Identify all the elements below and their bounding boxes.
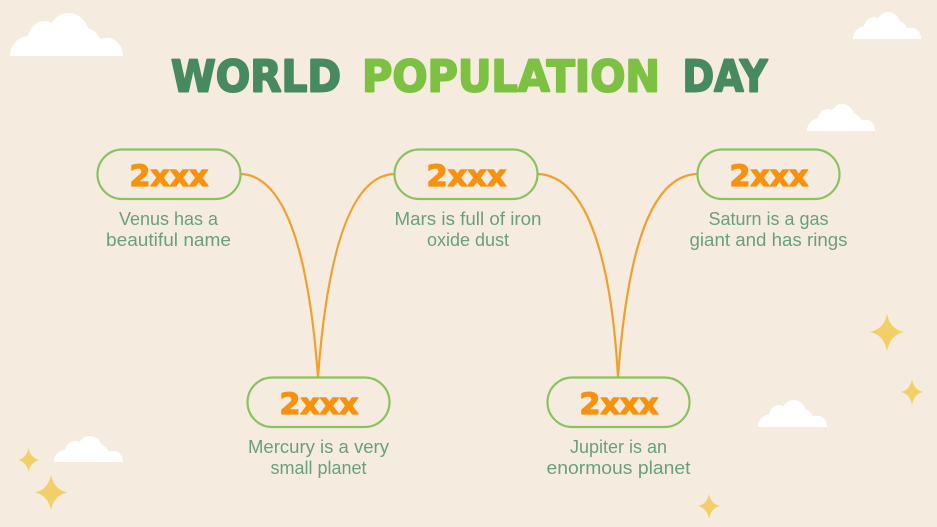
title: WORLD [171,52,341,102]
milestone: Saturn: Saturn is a gas [708,209,829,229]
milestone: Mercury [248,378,390,478]
milestone: Mercury: Mercury is a very [248,437,389,457]
icon: cloud top left [10,13,123,56]
milestone: Jupiter: enormous planet [546,458,690,478]
icon: star right small [901,379,923,405]
icon: star bottom left large [35,475,67,510]
milestone: Jupiter: Jupiter is an [570,437,667,457]
milestone: Mercury: 2xxx [280,387,358,421]
milestone: Mars: 2xxx [426,159,506,193]
milestone: Venus [98,150,240,250]
milestone: Mars: Mars is full of iron [394,209,542,229]
icon: star bottom centre [698,494,720,519]
milestone: Saturn: 2xxx [730,159,808,193]
milestone: Venus: Venus has a [119,209,219,229]
milestone: Venus: beautiful name [106,230,231,250]
connector curves [241,174,697,377]
icon: cloud upper right [807,104,875,131]
icon: cloud lower right [758,400,827,427]
title [171,52,768,102]
icon: star right large [870,314,904,351]
title: POPULATION [362,52,660,102]
milestone: Saturn [690,150,848,250]
milestone: Mars [394,150,542,250]
icon: cloud lower left [54,436,123,462]
icon: star bottom left small [18,448,40,472]
milestone: Jupiter [546,378,690,478]
milestone: Mercury: small planet [270,458,367,478]
title: DAY [682,52,768,102]
milestone: Venus: 2xxx [130,159,208,193]
milestone: Mars: oxide dust [427,230,509,250]
milestone: Saturn: giant and has rings [690,230,848,250]
milestone: Jupiter: 2xxx [580,387,658,421]
icon: cloud top right [853,12,921,39]
